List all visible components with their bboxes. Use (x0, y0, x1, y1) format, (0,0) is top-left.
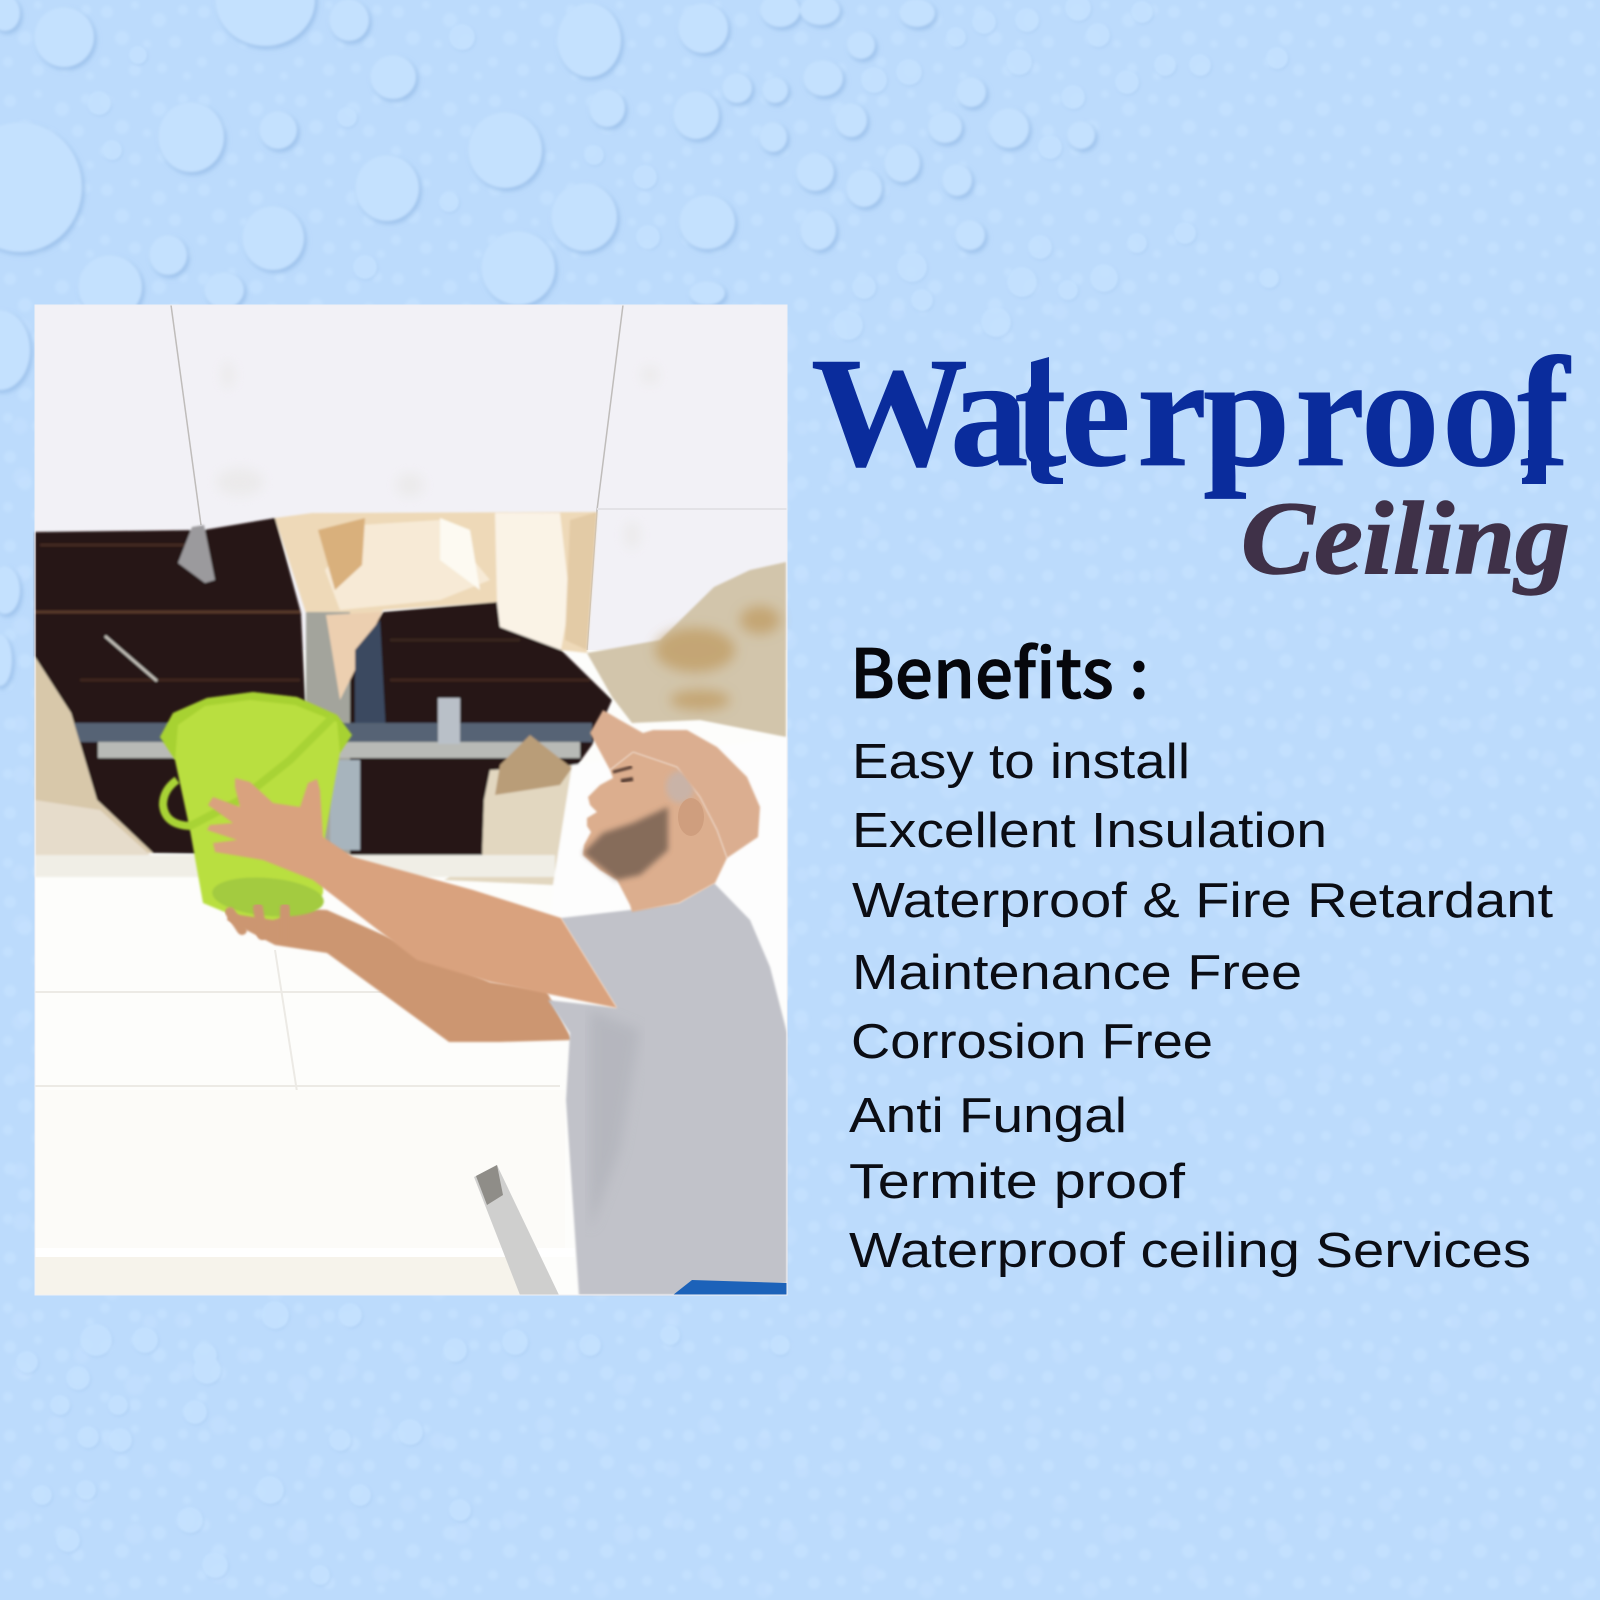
man: beard (583, 807, 668, 880)
benefit item: Easy to install (852, 735, 1190, 789)
hanging tape (178, 525, 215, 583)
man: shaved sideburn (666, 771, 694, 803)
white panel right of head (545, 737, 787, 1000)
torn plaster board (275, 512, 597, 690)
man: baseball cap (590, 710, 760, 858)
man: eye and brow (613, 767, 633, 781)
heading: Benefits: Benefits : (850, 619, 1149, 718)
benefits list (849, 735, 1553, 1278)
subtitle: Ceiling: Ceiling (1241, 481, 1570, 596)
man: trousers (673, 1280, 787, 1295)
man: t-shirt (548, 883, 787, 1295)
benefit item: Waterproof & Fire Retardant (852, 874, 1553, 928)
benefit item: Maintenance Free (852, 946, 1302, 1000)
upper ceiling panels and seams (171, 305, 623, 650)
man: lower hand fingers (230, 908, 285, 940)
title: Waterproof: Waterproof (811, 325, 1571, 499)
ladder rail (474, 1165, 559, 1295)
lower debris (444, 765, 574, 885)
benefit item: Termite proof (849, 1155, 1185, 1209)
bucket (160, 692, 352, 921)
benefit item: Corrosion Free (851, 1015, 1213, 1069)
man: ear (678, 798, 704, 836)
photo background: intact white ceiling (35, 305, 787, 1295)
dark hole in ceiling (35, 512, 787, 1000)
lower ceiling tile seams (35, 950, 560, 1240)
benefit item: Anti Fungal (849, 1089, 1127, 1143)
large droplets, top (0, 0, 1095, 686)
thin edge against page (35, 305, 787, 1295)
metal studs (306, 612, 350, 857)
stained plaster on the right (587, 562, 786, 737)
man: upper arm and hand (207, 778, 617, 1008)
wood plank streaks (35, 545, 590, 680)
man: lower arm (227, 905, 572, 1042)
man: neck and face (583, 752, 727, 912)
ledge below hole (35, 855, 555, 877)
title flourish: long f tail (1522, 450, 1546, 484)
benefit item: Excellent Insulation (852, 804, 1327, 858)
left debris (35, 657, 153, 855)
title flourish: long t stem (1031, 357, 1063, 484)
medium droplets (16, 0, 1288, 1585)
benefit item: Waterproof ceiling Services (849, 1224, 1531, 1278)
t-shirt fold shading (590, 1010, 640, 1230)
nail in hole (105, 636, 157, 681)
faint water marks on the ceiling (216, 361, 659, 549)
panel: photo of man catching ceiling leak with bucket (35, 305, 787, 1295)
